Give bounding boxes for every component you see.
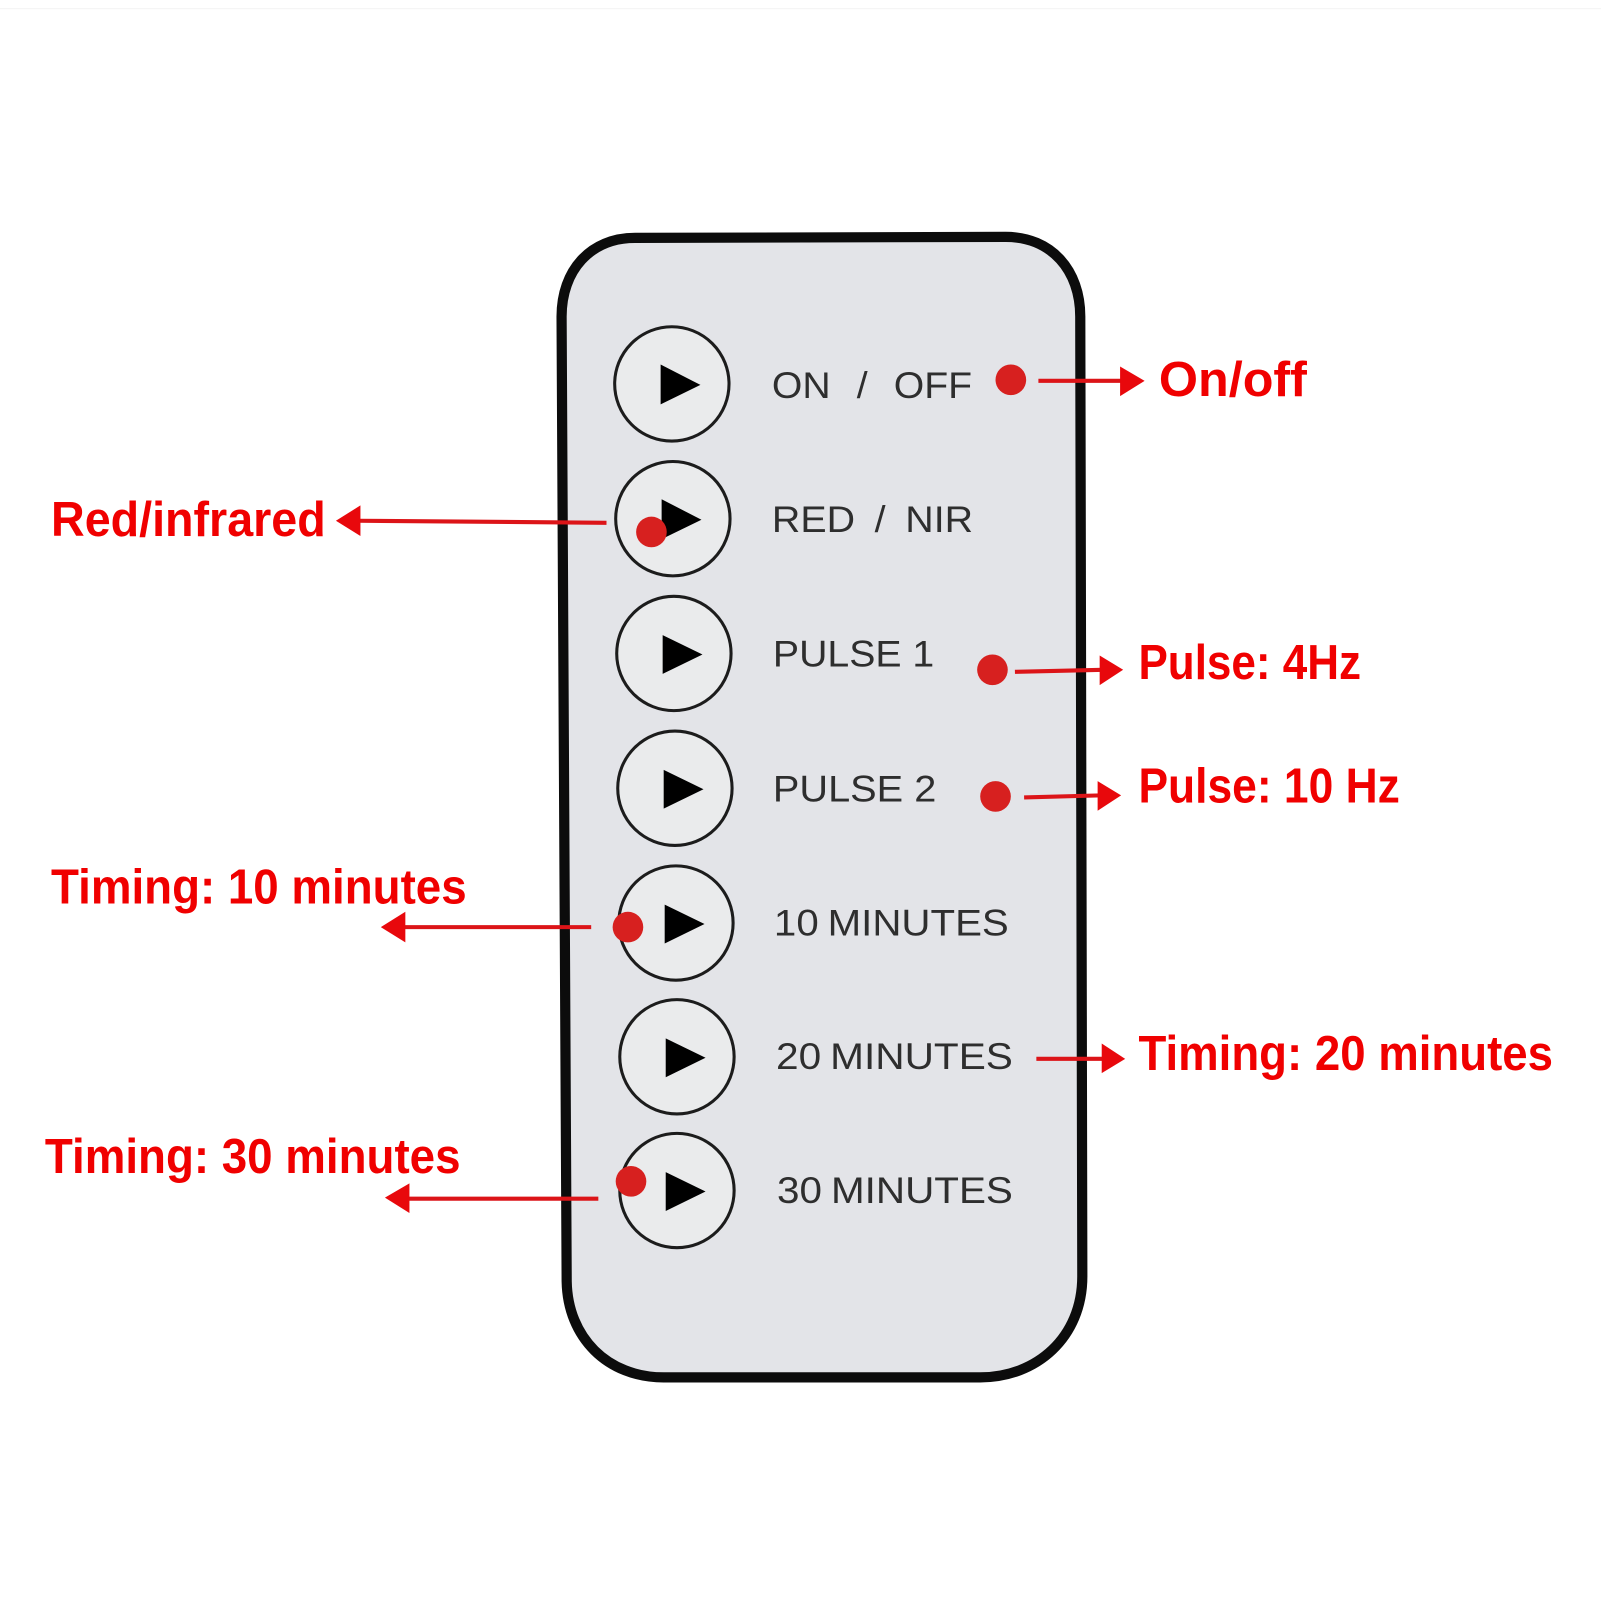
button: 10 minutes [619, 866, 733, 980]
button label: on/off: ON / OFF [772, 365, 972, 406]
button label: 10 minutes: 10 MINUTES [774, 902, 1009, 943]
button label: red/nir: RED / NIR [772, 499, 973, 540]
callout: pulse 4Hz [977, 636, 1361, 690]
callout: red/infrared [51, 493, 667, 547]
button: on/off [615, 327, 729, 441]
callout: on/off: On/off [1159, 353, 1308, 407]
callout: timing 30 minutes [45, 1130, 646, 1213]
callout: pulse 4Hz: Pulse: 4Hz [1138, 636, 1361, 690]
button: 30 minutes [620, 1133, 734, 1248]
panel: remote control body [562, 237, 1082, 1377]
button: pulse 2 [618, 731, 732, 845]
button label: 30 minutes: 30 MINUTES [777, 1170, 1013, 1211]
callout: pulse 10 Hz: Pulse: 10 Hz [1138, 760, 1400, 814]
callout: timing 20 minutes: Timing: 20 minutes [1138, 1027, 1553, 1081]
button: 20 minutes [620, 1000, 734, 1114]
button label: pulse 1: PULSE 1 [773, 634, 934, 675]
callout: timing 10 minutes [51, 861, 643, 942]
button label: 20 minutes: 20 MINUTES [776, 1036, 1013, 1077]
button label: pulse 2: PULSE 2 [773, 769, 936, 810]
callout: on/off [996, 353, 1308, 407]
callout: timing 10 minutes: Timing: 10 minutes [51, 861, 467, 915]
button: pulse 1 [617, 596, 731, 711]
callout: timing 30 minutes: Timing: 30 minutes [45, 1130, 460, 1184]
callout: pulse 10 Hz [980, 760, 1400, 814]
callout: red/infrared: Red/infrared [51, 493, 326, 547]
button: red/nir [616, 462, 730, 576]
